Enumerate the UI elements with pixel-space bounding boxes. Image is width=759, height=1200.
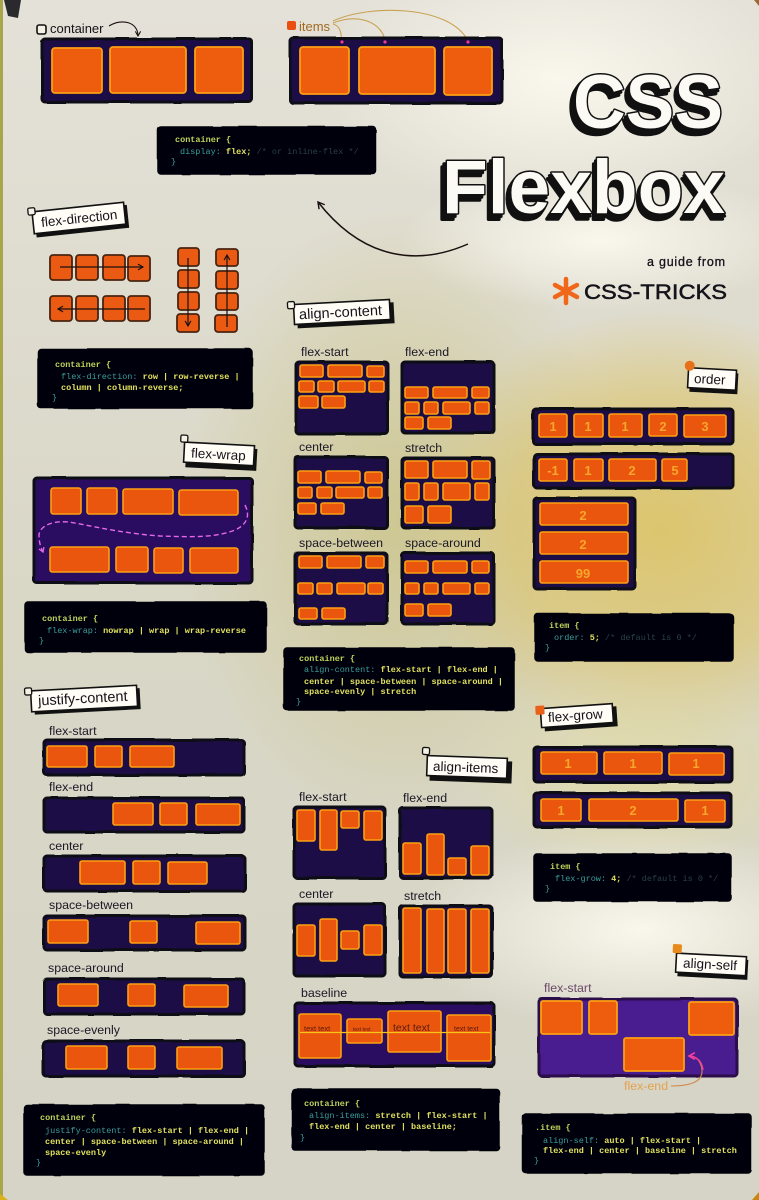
panel: order column: 2 <box>579 537 587 552</box>
code: justify-content: justify-content: flex-start | flex-end | <box>45 1126 249 1136</box>
code: justify-content: center | space-between | space-around | <box>45 1137 244 1147</box>
code: flex-grow: flex-grow: 4; /* default is 0 */ <box>555 874 718 884</box>
panel: justify space-around <box>44 961 244 1014</box>
panel: justify space-between: space-between <box>49 898 133 912</box>
code: justify-content: } <box>36 1158 41 1168</box>
code: display flex: } <box>171 157 176 167</box>
tag: flex-grow: flex-grow <box>547 706 603 725</box>
code: display flex: container { <box>175 135 231 145</box>
panel: justify space-evenly <box>43 1023 244 1076</box>
code: align-content: container { <box>299 654 355 664</box>
panel: align-content space-around: space-around <box>405 536 481 550</box>
panel: align-items baseline <box>295 986 494 1066</box>
tag: align-items <box>422 747 513 784</box>
code: flex-wrap: flex-wrap: nowrap | wrap | wrap-reverse <box>47 626 246 636</box>
title: CSS Flexbox: Flexbox <box>439 148 725 233</box>
panel: order column <box>534 498 635 589</box>
panel: align-items stretch <box>400 889 492 977</box>
code: flex-direction: column | column-reverse; <box>61 383 183 393</box>
container example: container <box>50 21 104 36</box>
tag: align-content: align-content <box>299 303 382 323</box>
panel: order row: 3 <box>701 419 709 434</box>
panel: align-content center <box>295 440 387 528</box>
container example <box>37 21 252 102</box>
panel: flex-grow double <box>534 793 731 827</box>
panel: align-content flex-end: flex-end <box>405 345 449 359</box>
code: align-items <box>292 1089 499 1150</box>
panel: order row with negative: -1 <box>547 463 559 478</box>
panel: align-content stretch: stretch <box>405 441 442 455</box>
panel: order row: 1 <box>584 419 592 434</box>
logo: CSS-Tricks: CSS-TRICKS <box>584 281 727 304</box>
panel: order column: 2 <box>579 508 587 523</box>
code: display flex <box>158 127 376 174</box>
panel: align-items flex-start: flex-start <box>299 790 347 804</box>
code: order: item { <box>549 621 580 631</box>
panel: align-items baseline: baseline <box>301 986 347 1000</box>
code: flex-grow: item { <box>550 862 581 872</box>
tag: flex-grow <box>535 700 618 732</box>
panel: justify space-around: space-around <box>48 961 124 975</box>
code: align-content: space-evenly | stretch <box>304 687 416 697</box>
title: CSS Flexbox <box>437 60 725 236</box>
tag: order <box>683 361 739 394</box>
code: flex-direction: } <box>52 393 57 403</box>
panel: align-content flex-end <box>402 345 494 433</box>
code: flex-grow <box>534 854 731 901</box>
panel: align-content center: center <box>299 440 333 454</box>
code: align-content: } <box>296 697 301 707</box>
code: align-content: align-content: flex-start | flex-end | <box>304 665 498 675</box>
code: align-self: flex-end | center | baseline | stretch <box>543 1146 737 1156</box>
panel: justify flex-start <box>44 724 244 775</box>
code: flex-wrap <box>25 602 266 652</box>
tag: flex-direction <box>28 198 129 238</box>
code: order: } <box>545 643 550 653</box>
tag: align-self: align-self <box>683 955 738 973</box>
code: justify-content: container { <box>40 1113 96 1123</box>
code: flex-direction <box>38 349 252 408</box>
tag: justify-content: justify-content <box>37 689 128 709</box>
panel: align-self diagram: flex-start <box>544 981 592 995</box>
code: justify-content <box>24 1105 264 1175</box>
panel: flex-wrap diagram <box>34 478 252 583</box>
code: align-self: } <box>534 1156 539 1166</box>
panel: align-items baseline: text text <box>393 1022 430 1034</box>
panel: align-content flex-start <box>296 345 388 434</box>
panel: align-items flex-end <box>400 791 492 878</box>
panel: order column: 99 <box>576 566 590 581</box>
subtitle: a guide from: a guide from <box>647 255 725 269</box>
panel: align-items baseline: text text <box>353 1027 371 1033</box>
code: order: order: 5; /* default is 0 */ <box>554 633 697 643</box>
panel: flex-grow equal: 1 <box>692 756 700 771</box>
code: align-content <box>284 648 514 710</box>
panel: justify flex-start: flex-start <box>49 724 97 738</box>
code: order <box>535 614 733 661</box>
panel: flex-grow double: 1 <box>557 803 565 818</box>
code: justify-content: space-evenly <box>45 1148 106 1158</box>
panel: align-content space-around <box>402 536 494 624</box>
panel: align-items flex-start <box>294 790 385 878</box>
panel: flex-grow double: 1 <box>701 803 709 818</box>
tag: justify-content <box>24 682 141 715</box>
code: align-self <box>523 1114 751 1173</box>
panel: align-items center <box>294 887 385 976</box>
panel: justify space-between <box>44 898 245 950</box>
panel: align-items center: center <box>299 887 333 901</box>
code: align-items: container { <box>304 1099 360 1109</box>
code: display flex: display: flex; /* or inline-flex */ <box>180 147 359 157</box>
items example: items <box>299 19 331 34</box>
panel: order row with negative: 2 <box>628 463 636 478</box>
panel: align-items baseline: text text <box>454 1026 479 1033</box>
panel: order row with negative: 5 <box>671 463 679 478</box>
code: align-self: .item { <box>535 1123 571 1133</box>
panel: align-content flex-start: flex-start <box>301 345 349 359</box>
code: align-items: flex-end | center | baseline; <box>309 1122 457 1132</box>
panel: align-content stretch <box>402 441 494 528</box>
panel: justify flex-end: flex-end <box>49 780 93 794</box>
panel: order row: 2 <box>659 419 667 434</box>
panel: justify center: center <box>49 839 83 853</box>
panel: order row with negative <box>534 454 733 488</box>
code: flex-grow: } <box>545 884 550 894</box>
code: align-content: center | space-between | space-around | <box>304 677 503 687</box>
panel: order row: 1 <box>549 419 557 434</box>
panel: justify space-evenly: space-evenly <box>47 1023 121 1037</box>
panel: order row with negative: 1 <box>584 463 592 478</box>
panel: align-content space-between <box>295 536 387 624</box>
code: flex-direction: flex-direction: row | row-reverse | <box>61 372 240 382</box>
panel: justify center <box>44 839 245 891</box>
panel: flex-grow double: 2 <box>629 803 637 818</box>
code: flex-wrap: } <box>39 636 44 646</box>
tag: order: order <box>694 371 726 388</box>
panel: align-items baseline: text text <box>304 1024 331 1033</box>
panel: order row: 1 <box>621 419 629 434</box>
code: flex-direction: container { <box>55 360 111 370</box>
title: CSS Flexbox: CSS <box>573 60 723 145</box>
panel: align-self diagram <box>539 981 737 1093</box>
title: CSS Flexbox: Flexbox <box>437 151 723 236</box>
tag: flex-wrap: flex-wrap <box>191 445 246 463</box>
panel: align-self diagram: flex-end <box>624 1079 668 1093</box>
panel: align-content space-between: space-between <box>299 536 383 550</box>
title: CSS Flexbox: Flexbox <box>442 145 725 230</box>
items example <box>287 10 502 103</box>
tag: align-items: align-items <box>433 759 499 776</box>
panel: flex-direction diagrams <box>50 248 238 332</box>
tag: align-self <box>671 944 749 980</box>
tag: align-content <box>287 296 395 329</box>
code: align-self: align-self: auto | flex-start | <box>543 1136 701 1146</box>
code: align-items: } <box>300 1133 305 1143</box>
tag: flex-direction: flex-direction <box>40 207 118 230</box>
title: CSS Flexbox: CSS <box>568 66 720 151</box>
panel: flex-grow equal <box>534 747 732 782</box>
tag: flex-wrap <box>179 435 258 471</box>
code: flex-wrap: container { <box>42 614 98 624</box>
panel: flex-grow equal: 1 <box>564 756 572 771</box>
panel: flex-grow equal: 1 <box>629 756 637 771</box>
panel: order row <box>533 409 733 444</box>
code: align-items: align-items: stretch | flex-start | <box>309 1111 488 1121</box>
title: CSS Flexbox: CSS <box>570 63 722 148</box>
arrow: title to code <box>318 202 468 256</box>
logo: CSS-Tricks <box>555 279 727 304</box>
panel: align-items stretch: stretch <box>404 889 441 903</box>
panel: justify flex-end <box>44 780 244 832</box>
panel: align-items flex-end: flex-end <box>403 791 447 805</box>
